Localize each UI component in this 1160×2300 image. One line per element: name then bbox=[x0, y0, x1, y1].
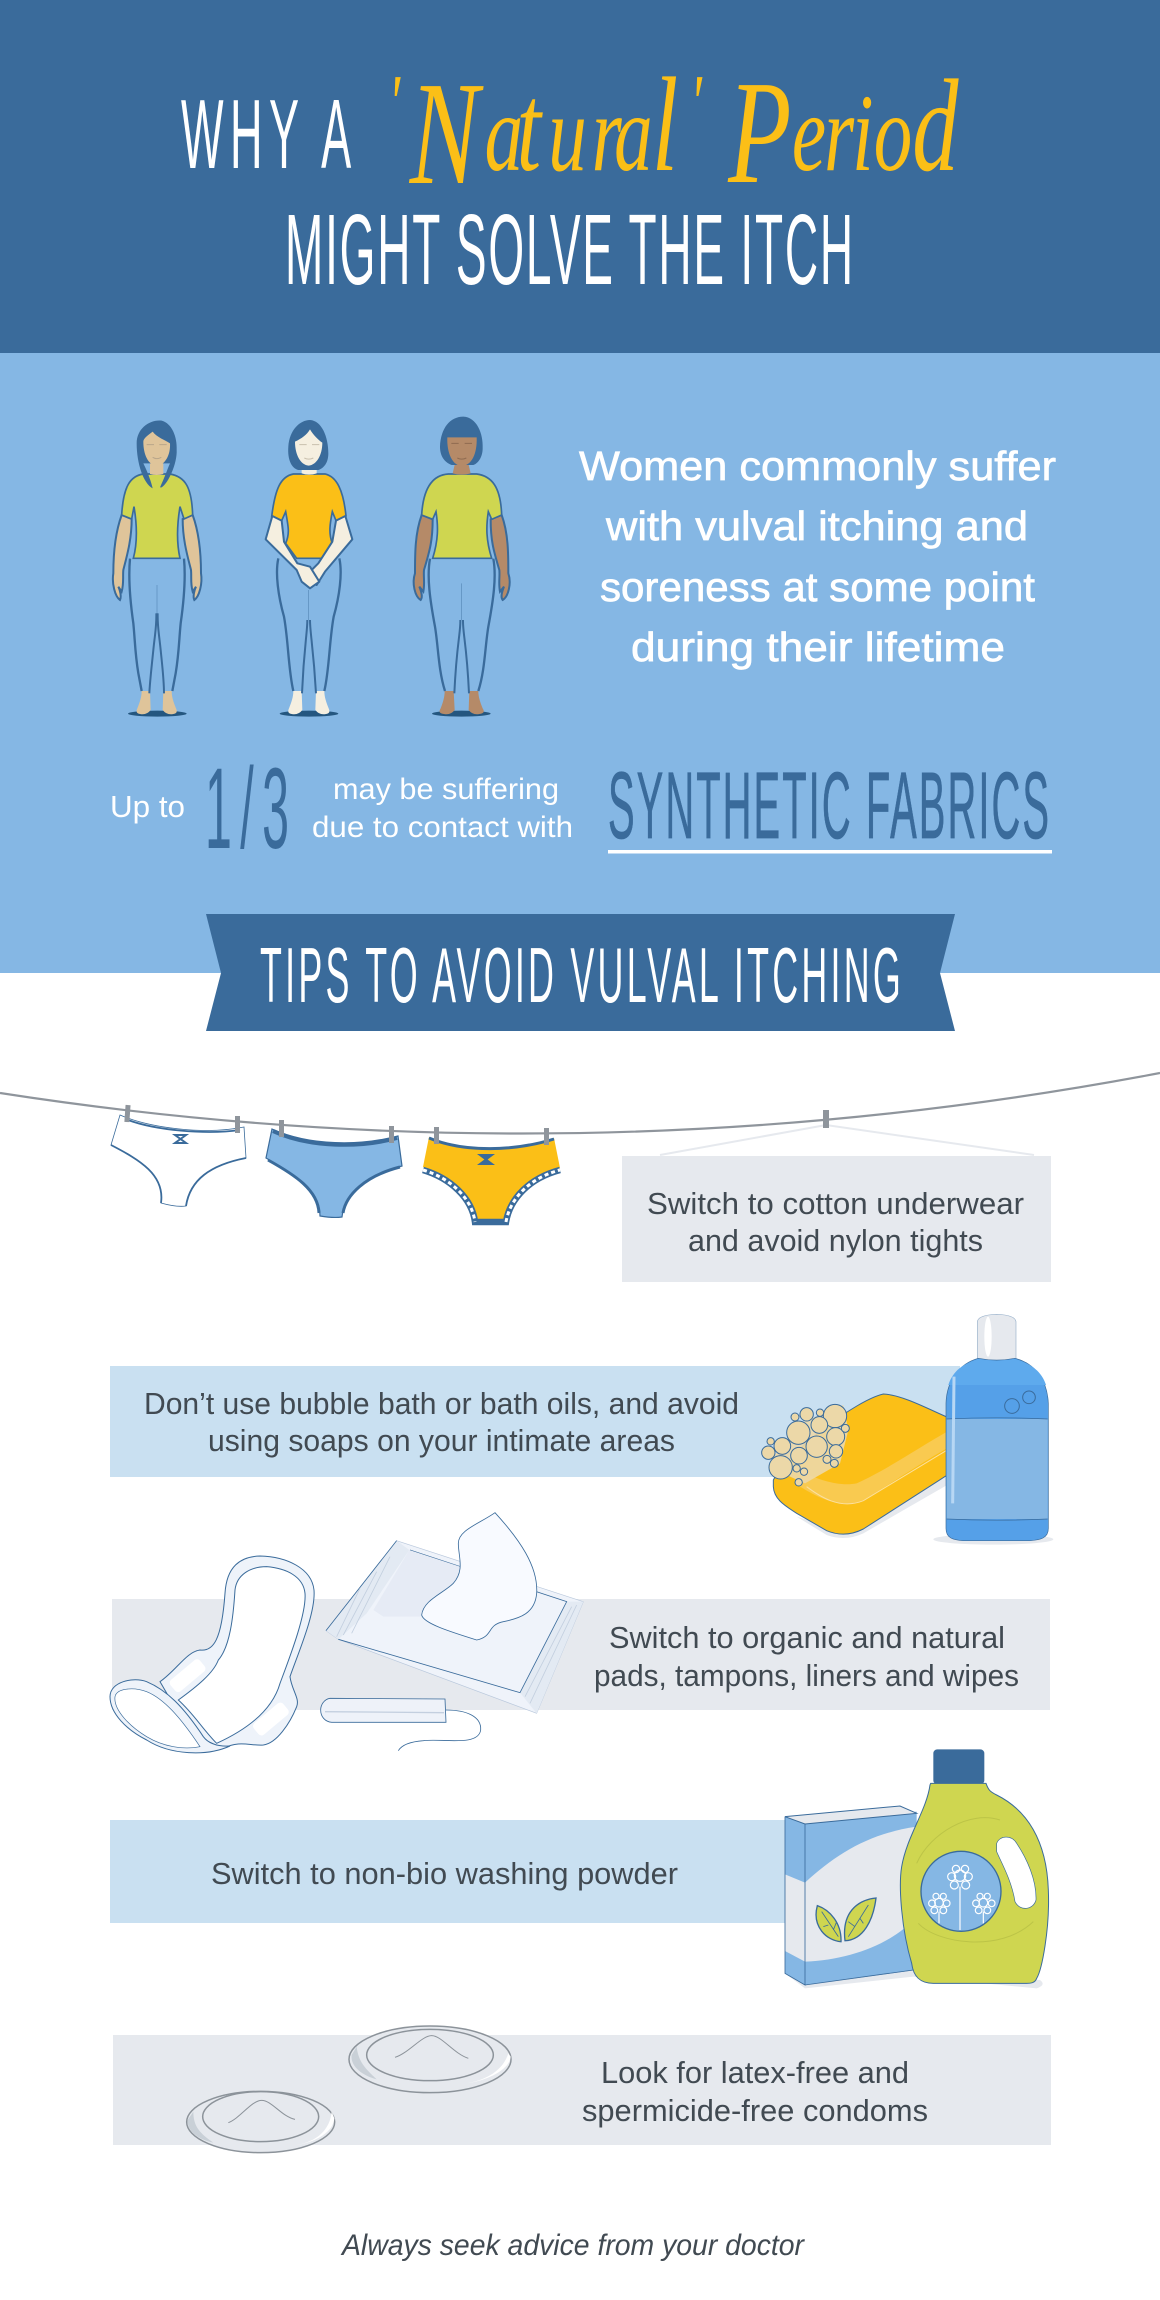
title: o bbox=[874, 72, 912, 194]
panel: tip 1 cotton underwear: Switch to cotton underwear bbox=[647, 1186, 1024, 1221]
title: t bbox=[517, 60, 544, 198]
panel: intro background bbox=[0, 353, 1160, 973]
icon: yellow lace underwear bbox=[423, 1137, 560, 1222]
icon: pad, wipes and tampon bbox=[110, 1513, 583, 1753]
panel: tip 2 bubble bath and soap: Don’t use bubble bath or bath oils, and avoid bbox=[144, 1386, 739, 1421]
intro text: soreness at some point bbox=[600, 564, 1036, 610]
panel: tip 5 latex-free condoms: spermicide-free condoms bbox=[582, 2093, 928, 2128]
title: r bbox=[824, 72, 855, 194]
panel: tip 4 non-bio washing powder: Switch to non-bio washing powder bbox=[211, 1856, 678, 1891]
panel: tip 2 bubble bath and soap bbox=[110, 1366, 960, 1477]
title: ' bbox=[388, 58, 401, 147]
woman 2 bbox=[266, 420, 352, 717]
title: P bbox=[727, 50, 791, 214]
panel: tip 3 organic pads: pads, tampons, liners and wipes bbox=[594, 1658, 1019, 1693]
icon: washing powder box and detergent bottle bbox=[785, 1749, 1049, 1988]
intro text bbox=[579, 443, 1056, 670]
soap bar bbox=[773, 1394, 950, 1534]
icon: condoms bbox=[187, 2026, 511, 2153]
statistic: up to one third: Up to bbox=[110, 789, 185, 824]
wipes packet bbox=[326, 1513, 583, 1713]
panel: tip 3 organic pads: Switch to organic and natural bbox=[609, 1620, 1005, 1655]
illustration: three women bbox=[113, 417, 510, 717]
footer note: Always seek advice from your doctor bbox=[340, 2229, 805, 2262]
title: e bbox=[792, 72, 826, 194]
banner: tips to avoid vulval itching bbox=[206, 914, 955, 1031]
icon: white underwear bbox=[111, 1115, 246, 1206]
intro text: during their lifetime bbox=[631, 624, 1005, 670]
panel: tip 3 organic pads bbox=[112, 1599, 1050, 1710]
intro text: Women commonly suffer bbox=[579, 443, 1056, 489]
title: d bbox=[912, 52, 959, 199]
statistic: up to one third: due to contact with bbox=[312, 811, 573, 844]
title: ' bbox=[690, 58, 703, 147]
sanitary pad bbox=[110, 1556, 314, 1753]
clothes line bbox=[0, 1073, 1160, 1155]
title: N bbox=[409, 51, 484, 215]
panel: tip 5 latex-free condoms: Look for latex-free and bbox=[601, 2055, 909, 2090]
title: MIGHT SOLVE THE ITCH bbox=[285, 195, 853, 306]
title: l bbox=[652, 51, 678, 200]
title: u bbox=[548, 72, 587, 194]
panel: tip 2 bubble bath and soap: using soaps on your intimate areas bbox=[208, 1423, 675, 1458]
powder box bbox=[785, 1806, 917, 1985]
icon: soap and bottle bbox=[762, 1314, 1053, 1545]
clothes pegs bbox=[124, 1105, 549, 1145]
title: i bbox=[852, 72, 874, 194]
title: a bbox=[485, 72, 523, 194]
title bbox=[181, 32, 959, 306]
intro text: with vulval itching and bbox=[605, 503, 1028, 549]
woman 3 bbox=[414, 417, 510, 717]
panel: tip 1 cotton underwear bbox=[622, 1156, 1051, 1282]
soap bubbles bbox=[762, 1404, 849, 1486]
bottle bbox=[946, 1314, 1048, 1541]
icon: blue underwear bbox=[266, 1129, 402, 1217]
title: r bbox=[592, 72, 623, 194]
title: a bbox=[614, 72, 653, 194]
panel: tip 1 cotton underwear: and avoid nylon tights bbox=[688, 1223, 983, 1258]
panel: tip 5 latex-free condoms bbox=[113, 2035, 1051, 2145]
title: WHY A bbox=[181, 81, 351, 190]
panel: tip 4 non-bio washing powder bbox=[110, 1820, 800, 1923]
tampon bbox=[321, 1698, 481, 1751]
heading: synthetic fabrics: SYNTHETIC FABRICS bbox=[608, 753, 1049, 859]
banner: tips to avoid vulval itching: TIPS TO AVOID VULVAL ITCHING bbox=[260, 931, 901, 1019]
statistic: up to one third: may be suffering bbox=[333, 773, 559, 806]
detergent bottle bbox=[900, 1749, 1049, 1983]
statistic: up to one third: 1/3 bbox=[205, 744, 289, 873]
woman 1 bbox=[113, 421, 201, 717]
panel: header background bbox=[0, 0, 1160, 353]
statistic: up to one third bbox=[110, 744, 573, 873]
